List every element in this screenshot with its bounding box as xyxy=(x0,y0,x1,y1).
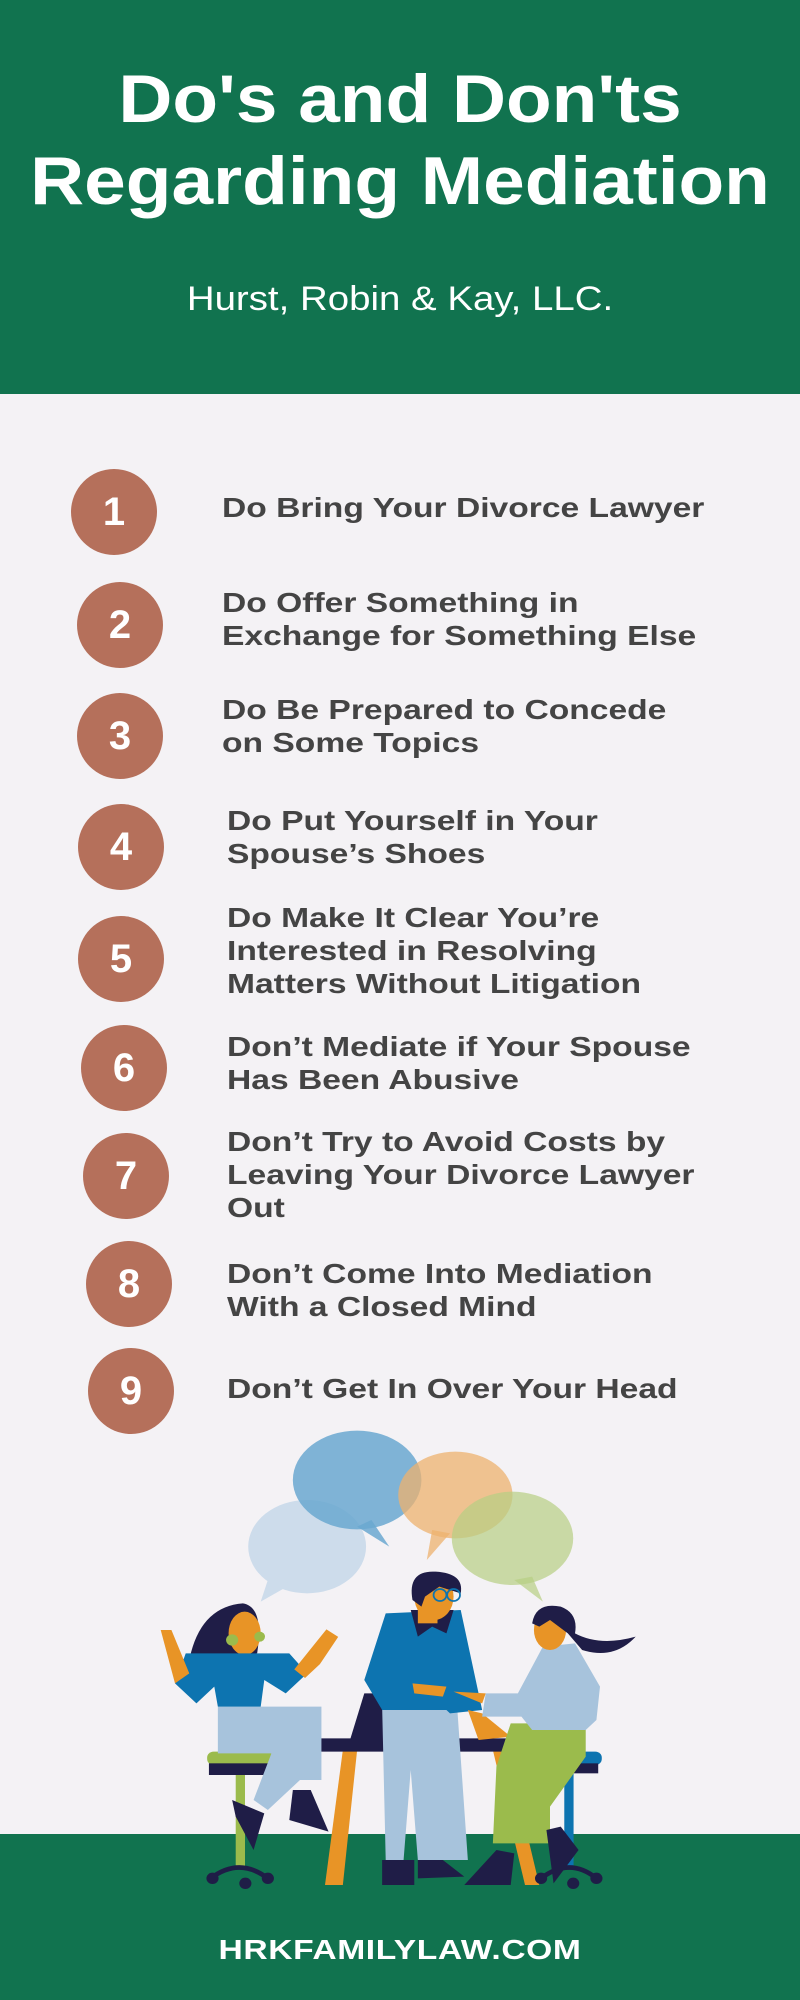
text: Exchange for Something Else xyxy=(222,620,696,651)
title: Do's and Don'ts xyxy=(118,61,682,137)
text: Don’t Get In Over Your Head xyxy=(227,1373,678,1404)
text: Do Be Prepared to Concede xyxy=(222,694,666,725)
text: Don’t Come Into Mediation xyxy=(227,1258,653,1289)
item 7 xyxy=(83,1126,694,1223)
text: Don’t Try to Avoid Costs by xyxy=(227,1126,665,1157)
text: Do Bring Your Divorce Lawyer xyxy=(222,492,704,523)
text: 3 xyxy=(109,714,131,758)
item 9 xyxy=(88,1348,678,1434)
item 4 xyxy=(78,804,598,890)
header xyxy=(0,0,800,394)
text: 2 xyxy=(109,603,131,647)
text: Do Offer Something in xyxy=(222,587,579,618)
text: With a Closed Mind xyxy=(227,1291,537,1322)
person right on blue stool xyxy=(454,1606,636,1889)
item 8 xyxy=(86,1241,653,1327)
text: Spouse’s Shoes xyxy=(227,838,485,869)
text: 1 xyxy=(103,490,125,534)
item 5 xyxy=(78,902,641,1002)
text: 7 xyxy=(115,1154,137,1198)
illustration: people mediating xyxy=(160,1430,636,1889)
footer url: HRKFAMILYLAW.COM xyxy=(218,1934,582,1965)
text: Interested in Resolving xyxy=(227,935,597,966)
text: Do Make It Clear You’re xyxy=(227,902,599,933)
item 2 xyxy=(77,582,696,668)
person left on green stool xyxy=(161,1603,332,1889)
item 1 xyxy=(71,469,704,555)
item 6 xyxy=(81,1025,691,1111)
item 3 xyxy=(77,693,666,779)
text: Do Put Yourself in Your xyxy=(227,805,598,836)
text: Leaving Your Divorce Lawyer xyxy=(227,1159,694,1190)
text: on Some Topics xyxy=(222,727,479,758)
title: Regarding Mediation xyxy=(30,143,770,219)
text: Don’t Mediate if Your Spouse xyxy=(227,1031,691,1062)
subtitle: Hurst, Robin & Kay, LLC. xyxy=(187,280,613,318)
person middle standing xyxy=(364,1572,511,1885)
text: 6 xyxy=(113,1046,135,1090)
table and laptop xyxy=(302,1693,539,1885)
text: Has Been Abusive xyxy=(227,1064,519,1095)
title xyxy=(30,61,770,219)
text: 4 xyxy=(110,825,132,869)
text: Matters Without Litigation xyxy=(227,968,641,999)
speech bubbles xyxy=(248,1431,573,1602)
text: 9 xyxy=(120,1369,142,1413)
footer xyxy=(0,1834,800,2000)
text: 8 xyxy=(118,1262,140,1306)
text: Out xyxy=(227,1192,285,1223)
text: 5 xyxy=(110,937,132,981)
